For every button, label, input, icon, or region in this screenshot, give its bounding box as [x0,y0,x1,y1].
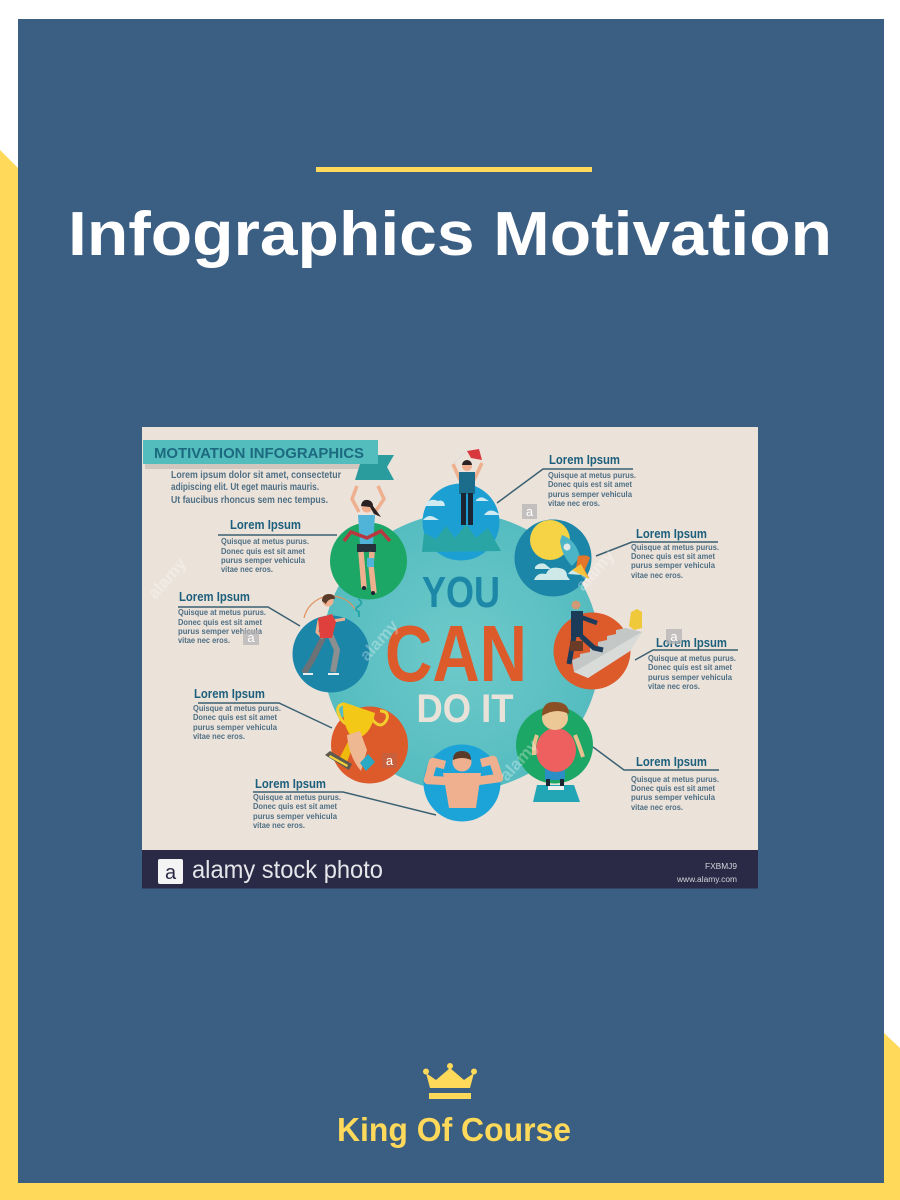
callout: trophy label: Donec quis est sit amet [193,712,277,722]
icon: woman at finish line [330,486,407,600]
callout: finish line label: vitae nec eros. [221,564,273,574]
callout: muscleman label: Quisque at metus purus. [253,792,341,802]
callout: stairs label: Quisque at metus purus. [648,653,736,663]
stock photo watermarks: a [386,753,394,768]
callout: top right label: Quisque at metus purus. [548,470,636,480]
callout: rocket label: Donec quis est sit amet [631,551,715,561]
centre slogan: YOU [422,568,500,617]
stock photo watermarks: a [670,629,678,644]
callout: trophy label [193,687,332,741]
icon: person on scale [516,702,593,802]
centre slogan: CAN [385,609,527,698]
callout: top right label: Lorem Ipsum [549,453,620,467]
central teal circle [322,513,600,791]
callout: rocket label: Lorem Ipsum [636,527,707,541]
footer wordmark: alamy stock photo [192,856,383,884]
stock photo footer bar: a [165,862,177,884]
callout: finish line label: Quisque at metus purus. [221,536,309,546]
stock photo watermarks: alamy [144,554,191,603]
intro text: adipiscing elit. Ut eget mauris mauris. [171,482,319,493]
callout: scale label: Lorem Ipsum [636,755,707,769]
callout: rocket label: vitae nec eros. [631,570,683,580]
callout: rocket label: Quisque at metus purus. [631,542,719,552]
callout: runner label: purus semper vehicula [178,626,262,636]
stock photo watermarks: alamy [572,546,619,595]
stock photo watermarks: a [526,504,534,519]
callout: trophy label: vitae nec eros. [193,731,245,741]
callout: finish line label: purus semper vehicula [221,555,305,565]
callout: stairs label [635,636,738,691]
callout: scale label [593,747,719,812]
icon: runner with skipping rope [292,594,370,692]
stock photo watermarks: a [247,630,255,645]
callout: finish line label [218,518,337,574]
callout: top right label: vitae nec eros. [548,498,600,508]
centre slogan: DO IT [416,687,514,731]
stock photo watermarks [144,504,682,785]
callout: stairs label: vitae nec eros. [648,681,700,691]
callout: muscleman label [253,777,436,830]
callout: stairs label: Donec quis est sit amet [648,662,732,672]
icon: muscleman [424,744,500,822]
callout: muscleman label: vitae nec eros. [253,820,305,830]
icon: rocket and moon [514,520,592,596]
callout: muscleman label: purus semper vehicula [253,811,337,821]
callout: trophy label: purus semper vehicula [193,722,277,732]
callout: top right label: Donec quis est sit amet [548,479,632,489]
callout: finish line label: Donec quis est sit amet [221,546,305,556]
callout: scale label: Quisque at metus purus. [631,774,719,784]
icon: businessman climbing stairs [554,600,642,690]
callout: trophy label: Lorem Ipsum [194,687,265,701]
callout: top right label: purus semper vehicula [548,489,632,499]
ribbon heading: MOTIVATION INFOGRAPHICS [154,446,364,462]
callout: muscleman label: Lorem Ipsum [255,777,326,791]
footer image code: FXBMJ9 [705,862,738,871]
callout: runner label: Donec quis est sit amet [178,617,262,627]
intro text: Ut faucibus rhoncus sem nec tempus. [171,495,328,506]
callout: rocket label [596,527,719,580]
footer logo [158,859,183,884]
callout: top right label [497,453,636,508]
centre slogan [385,568,527,731]
callout: runner label: vitae nec eros. [178,635,230,645]
ribbon banner [143,440,394,480]
stock photo footer bar [142,850,758,888]
stock photo watermarks: alamy [496,736,543,785]
title: Infographics Motivation [68,200,832,269]
icon: trophy in hand [325,702,408,784]
intro text [171,470,341,506]
motivation infographic image [142,427,758,888]
intro text: Lorem ipsum dolor sit amet, consectetur [171,470,341,481]
callout: runner label [178,590,300,645]
title accent line [316,167,592,172]
callout: stairs label: Lorem Ipsum [656,636,727,650]
callout: scale label: purus semper vehicula [631,792,715,802]
callout: stairs label: purus semper vehicula [648,672,732,682]
callout: runner label: Quisque at metus purus. [178,607,266,617]
icon: climber with flag [422,449,501,560]
icon: crown [423,1063,477,1099]
image background [142,427,758,850]
callout: muscleman label: Donec quis est sit amet [253,801,337,811]
callout: rocket label: purus semper vehicula [631,560,715,570]
callout: runner label: Lorem Ipsum [179,590,250,604]
footer website: www.alamy.com [676,875,737,884]
callout: scale label: vitae nec eros. [631,802,683,812]
brand name: King Of Course [337,1111,571,1148]
callout: trophy label: Quisque at metus purus. [193,703,281,713]
callout: scale label: Donec quis est sit amet [631,783,715,793]
stock photo watermarks: alamy [356,616,403,665]
callout: finish line label: Lorem Ipsum [230,518,301,532]
